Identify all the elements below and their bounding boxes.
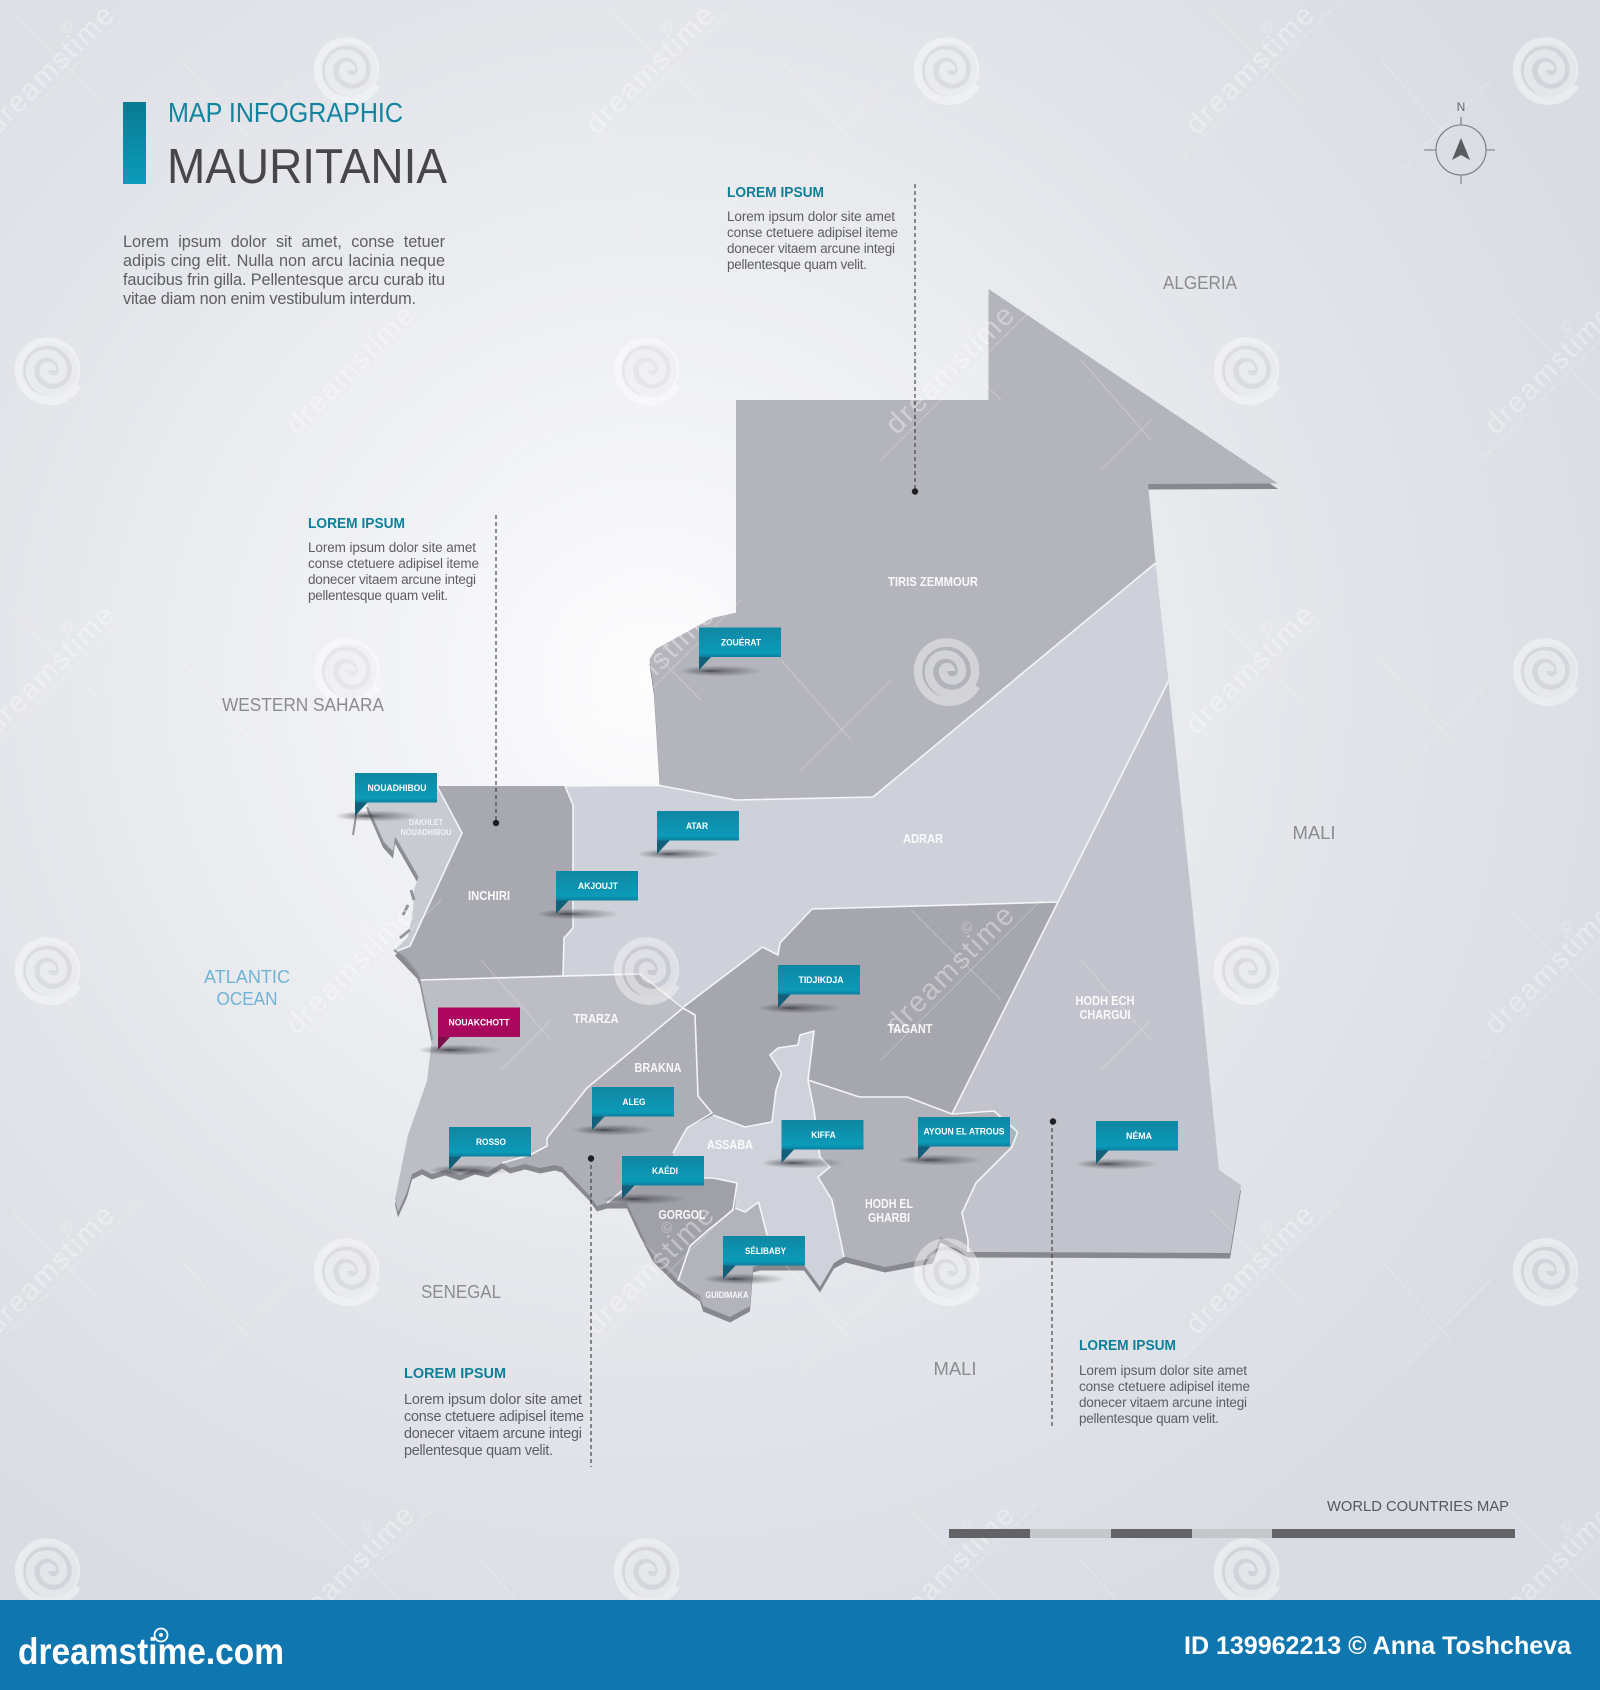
flag: Aleg: ALEG xyxy=(622,1097,646,1108)
label: Atlantic Ocean: ATLANTIC xyxy=(204,967,290,987)
watermark text: © xyxy=(57,18,77,38)
callout body: pellentesque quam velit. xyxy=(404,1443,553,1459)
watermark text: dreamstime xyxy=(879,299,1021,441)
watermark text: dreamstime xyxy=(879,899,1021,1041)
footer band xyxy=(0,1600,1600,1690)
watermark text: © xyxy=(357,918,377,938)
label: Hodh Ech Chargui: HODH ECH xyxy=(1076,994,1134,1008)
region: Gorgol xyxy=(607,1178,737,1281)
callout body: donecer vitaem arcune integi xyxy=(308,572,476,587)
flag: Atar: ATAR xyxy=(686,821,708,832)
compass N: N xyxy=(1457,100,1465,114)
flag: Zouérat: ZOUÉRAT xyxy=(721,638,761,648)
leader line xyxy=(1050,1118,1056,1429)
callout body: pellentesque quam velit. xyxy=(1079,1411,1219,1426)
flag: Ayoun el Atrous xyxy=(898,1117,1010,1166)
callout body xyxy=(1079,1363,1250,1426)
watermark text: © xyxy=(357,318,377,338)
callout body: conse ctetuere adipisel iteme xyxy=(1079,1379,1250,1394)
callout body: donecer vitaem arcune integi xyxy=(1079,1395,1247,1410)
callout body: conse ctetuere adipisel iteme xyxy=(404,1409,584,1425)
region: Hodh Ech Chargui xyxy=(952,681,1241,1253)
watermark text: dreamstime xyxy=(879,1499,1021,1641)
title: MAURITANIA xyxy=(167,140,447,194)
callout body: Lorem ipsum dolor site amet xyxy=(727,209,895,224)
intro paragraph: faucibus frin gilla. Pellentesque arcu curab itu xyxy=(123,271,445,289)
watermark text: © xyxy=(1257,1218,1277,1238)
label: Hodh El Gharbi: GHARBI xyxy=(868,1211,910,1225)
label: Western Sahara: WESTERN SAHARA xyxy=(222,695,384,715)
flag: Nouakchott xyxy=(418,1008,520,1056)
flag: Rosso xyxy=(429,1127,531,1176)
flag: Kiffa xyxy=(761,1120,864,1168)
intro paragraph: adipis cing elit. Nulla non arcu lacinia neque xyxy=(123,252,445,270)
label: Atlantic Ocean: OCEAN xyxy=(216,989,278,1009)
flag: Kaédi: KAÉDI xyxy=(652,1166,678,1177)
flag: Aleg xyxy=(572,1087,674,1136)
watermark text: © xyxy=(957,1518,977,1538)
label: Brakna: BRAKNA xyxy=(634,1061,682,1075)
coast extrusion details xyxy=(353,807,433,1040)
flag: Nouadhibou xyxy=(335,773,437,822)
label: Senegal: SENEGAL xyxy=(421,1282,501,1302)
leader line xyxy=(588,1155,594,1467)
watermark text: © xyxy=(357,1518,377,1538)
watermark text: © xyxy=(657,1218,677,1238)
watermark text: dreamstime xyxy=(579,599,721,741)
callout heading: LOREM IPSUM xyxy=(308,516,405,532)
label: Atlantic Ocean xyxy=(204,967,290,1009)
region: Assaba xyxy=(671,1031,844,1287)
footer background xyxy=(0,1600,1600,1690)
label: Gorgol: GORGOL xyxy=(658,1208,706,1222)
watermark text: dreamstime xyxy=(1179,0,1321,141)
scale bar xyxy=(949,1499,1515,1538)
watermark text: dreamstime xyxy=(579,1199,721,1341)
callout heading: LOREM IPSUM xyxy=(1079,1338,1176,1354)
watermark text: © xyxy=(657,18,677,38)
label: Algeria: ALGERIA xyxy=(1163,273,1237,293)
region: Adrar xyxy=(563,563,1168,1007)
region: Tagant xyxy=(684,902,1058,1127)
callout: east xyxy=(1050,1118,1250,1429)
label: Adrar: ADRAR xyxy=(903,832,943,846)
flag: Atar xyxy=(637,811,739,860)
watermark text: © xyxy=(1556,318,1576,338)
flag: Rosso: ROSSO xyxy=(476,1137,506,1148)
watermark text: dreamstime xyxy=(1179,1199,1321,1341)
watermark text: © xyxy=(57,618,77,638)
flag: Kaédi xyxy=(602,1156,704,1204)
callout heading: LOREM IPSUM xyxy=(404,1366,506,1382)
scale caption: WORLD COUNTRIES MAP xyxy=(1327,1499,1509,1515)
label: Mali south: MALI xyxy=(934,1359,976,1379)
watermark text: © xyxy=(57,1218,77,1238)
label: Hodh Ech Chargui xyxy=(1076,994,1134,1022)
flag: Sélibaby xyxy=(703,1236,805,1284)
region: Tiris Zemmour xyxy=(650,289,1278,800)
country labels xyxy=(204,273,1336,1379)
label: Dakhlet Nouadhibou: DAKHLET xyxy=(409,818,443,827)
city flags xyxy=(335,628,1178,1284)
compass xyxy=(1424,100,1495,184)
callout body: donecer vitaem arcune integi xyxy=(404,1426,582,1442)
watermark text: dreamstime xyxy=(279,299,421,441)
label: Guidimaka: GUIDIMAKA xyxy=(706,1290,749,1300)
footer credit: ID 139962213 © Anna Toshcheva xyxy=(1184,1632,1572,1660)
label: Dakhlet Nouadhibou xyxy=(400,818,452,837)
callout body xyxy=(308,540,479,603)
watermark text: © xyxy=(1556,1518,1576,1538)
flag: Akjoujt: AKJOUJT xyxy=(578,881,618,892)
label: Tagant: TAGANT xyxy=(888,1022,933,1036)
subtitle: MAP INFOGRAPHIC xyxy=(168,97,403,128)
region: Hodh El Gharbi xyxy=(808,1080,1018,1267)
flag: Akjoujt xyxy=(536,871,638,920)
watermark text: © xyxy=(1556,918,1576,938)
scale segments xyxy=(949,1529,1515,1538)
callout: north xyxy=(727,184,918,495)
watermark text: dreamstime xyxy=(1179,599,1321,741)
label: Dakhlet Nouadhibou: NOUADHIBOU xyxy=(400,828,452,837)
watermark text: © xyxy=(957,918,977,938)
watermark text: dreamstime xyxy=(279,899,421,1041)
region: Brakna xyxy=(502,1008,712,1206)
intro paragraph: vitae diam non enim vestibulum interdum. xyxy=(123,290,416,308)
label: Trarza: TRARZA xyxy=(574,1012,618,1026)
callout body: pellentesque quam velit. xyxy=(727,257,867,272)
label: Tiris Zemmour: TIRIS ZEMMOUR xyxy=(888,575,978,589)
label: Inchiri: INCHIRI xyxy=(468,889,510,903)
region labels xyxy=(400,575,1134,1300)
callout body: Lorem ipsum dolor site amet xyxy=(404,1392,582,1408)
compass needle xyxy=(1452,138,1470,160)
callout body: conse ctetuere adipisel iteme xyxy=(727,225,898,240)
label: Hodh Ech Chargui: CHARGUI xyxy=(1080,1008,1130,1022)
callout body: pellentesque quam velit. xyxy=(308,588,448,603)
flag: Tidjikdja xyxy=(758,965,860,1014)
watermark text: dreamstime xyxy=(279,1499,421,1641)
flag: Néma xyxy=(1075,1121,1178,1170)
intro paragraph: Lorem ipsum dolor sit amet, conse tetuer xyxy=(123,233,446,251)
flag: Sélibaby: SÉLIBABY xyxy=(745,1246,787,1257)
callout body: Lorem ipsum dolor site amet xyxy=(308,540,476,555)
callout body xyxy=(727,209,898,272)
callout body: Lorem ipsum dolor site amet xyxy=(1079,1363,1247,1378)
label: Hodh El Gharbi xyxy=(865,1197,913,1225)
watermark text: © xyxy=(657,618,677,638)
callout body xyxy=(404,1392,584,1459)
callout: south xyxy=(404,1155,594,1467)
flag: Nouakchott: NOUAKCHOTT xyxy=(448,1018,510,1028)
label: Hodh El Gharbi: HODH EL xyxy=(865,1197,913,1211)
flag: Zouérat xyxy=(679,628,781,676)
leader line xyxy=(493,515,499,826)
flag: Tidjikdja: TIDJIKDJA xyxy=(798,975,844,986)
title accent bar xyxy=(123,102,146,184)
watermark text: dreamstime xyxy=(579,0,721,141)
callout: west xyxy=(308,515,499,826)
callout heading: LOREM IPSUM xyxy=(727,185,824,201)
map extrusion shadow xyxy=(367,294,1278,1322)
map of Mauritania regions xyxy=(353,289,1278,1322)
label: Mali east: MALI xyxy=(1292,823,1336,843)
flag: Ayoun el Atrous: AYOUN EL ATROUS xyxy=(924,1126,1004,1138)
callout body: donecer vitaem arcune integi xyxy=(727,241,895,256)
watermark text: © xyxy=(957,318,977,338)
region: Trarza xyxy=(395,974,683,1212)
leader line xyxy=(912,184,918,495)
watermark text: © xyxy=(1257,618,1277,638)
flag: Kiffa: KIFFA xyxy=(811,1130,836,1141)
flag: Néma: NÉMA xyxy=(1126,1131,1152,1142)
region: Dakhlet Nouadhibou xyxy=(367,786,462,951)
region borders xyxy=(397,563,1168,1281)
region: Inchiri xyxy=(397,786,573,980)
compass dial xyxy=(1424,117,1495,184)
watermark text: © xyxy=(1257,18,1277,38)
intro paragraph xyxy=(123,233,446,308)
footer logo: dreamstime.com xyxy=(18,1631,284,1672)
flag: Nouadhibou: NOUADHIBOU xyxy=(368,783,427,794)
label: Assaba: ASSABA xyxy=(707,1138,753,1152)
callout body: conse ctetuere adipisel iteme xyxy=(308,556,479,571)
region: Guidimaka xyxy=(678,1202,770,1317)
title block xyxy=(123,97,447,194)
